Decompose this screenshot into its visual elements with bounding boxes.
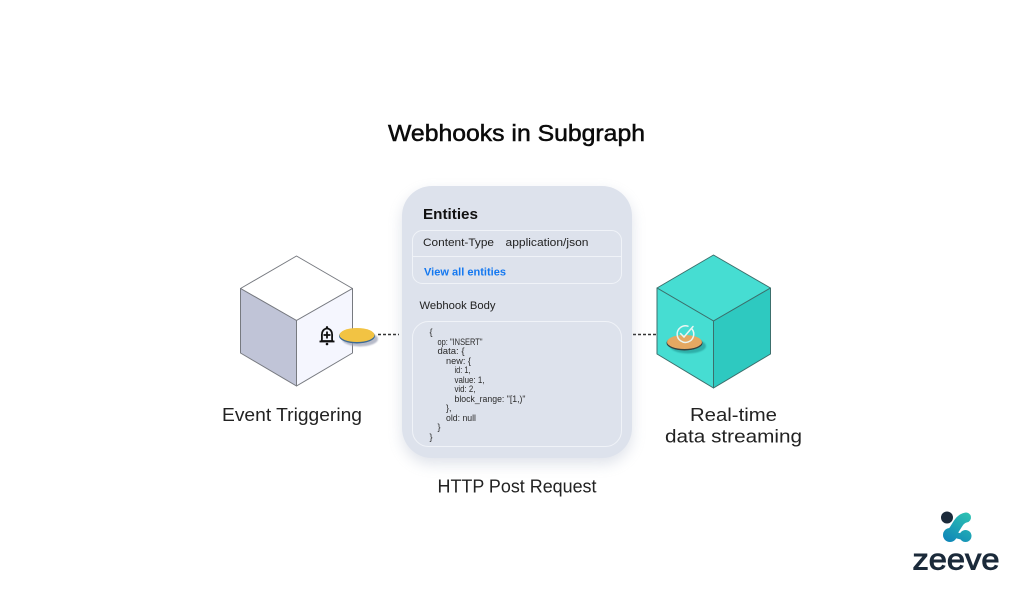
code block: webhook body: op: "INSERT"	[438, 337, 482, 347]
logo: zeeve	[912, 512, 1000, 576]
panel: entities webhook card	[402, 186, 632, 464]
label: Webhook Body: Webhook Body	[420, 300, 496, 312]
caption: Event Triggering: Event Triggering	[222, 404, 362, 425]
icon: orange disc	[666, 335, 706, 354]
connector: left cube to panel	[378, 334, 399, 336]
code block: webhook body: id: 1,	[454, 365, 470, 375]
code block: webhook body: }	[438, 422, 441, 432]
logo wordmark: zeeve	[912, 544, 1000, 576]
code block: webhook body: value: 1,	[454, 375, 484, 385]
caption: Real-time data streaming: Real-time	[690, 404, 777, 425]
table: content type and link: Content-Type	[423, 237, 494, 249]
code block: webhook body: old: null	[446, 413, 476, 423]
code block: webhook body: }	[430, 432, 433, 442]
connector: panel to right cube	[633, 334, 657, 336]
icon: white cube	[240, 256, 352, 386]
icon: check circle	[677, 326, 694, 342]
code block: webhook body: new: {	[446, 356, 471, 366]
code block: webhook body: data: {	[438, 346, 464, 356]
icon: teal cube	[657, 255, 770, 388]
table: content type and link	[412, 230, 622, 284]
icon: yellow disc	[339, 328, 378, 346]
caption: Real-time data streaming	[665, 404, 802, 446]
code block: webhook body: },	[446, 403, 452, 413]
table: content type and link: View all entities	[424, 266, 506, 278]
title: Webhooks in Subgraph	[388, 120, 645, 146]
icon: bell with plus	[320, 326, 334, 345]
logo mark	[941, 512, 972, 542]
code block: webhook body: block_range: "[1,)"	[454, 394, 526, 404]
code block: webhook body	[412, 322, 622, 446]
heading: Entities: Entities	[423, 206, 478, 223]
caption: HTTP Post Request: HTTP Post Request	[438, 476, 596, 496]
code block: webhook body: {	[430, 327, 433, 337]
table: content type and link: application/json	[506, 237, 588, 249]
code block: webhook body: vid: 2,	[454, 384, 476, 394]
caption: Real-time data streaming: data streaming	[665, 426, 802, 446]
